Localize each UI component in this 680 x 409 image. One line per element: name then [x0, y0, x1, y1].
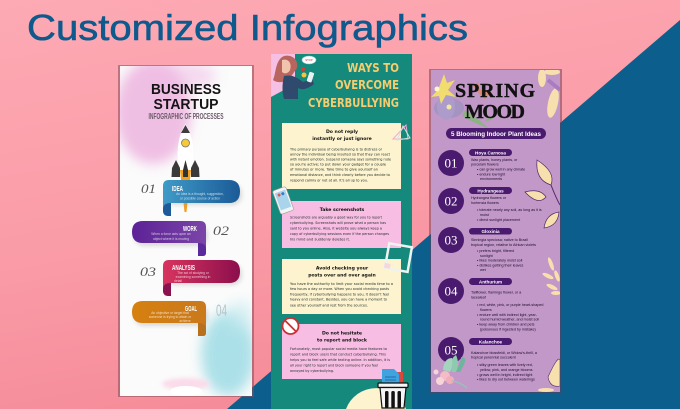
- heading: STARTUP: [154, 97, 219, 113]
- step 02 work: When a force acts upon an: [151, 232, 191, 236]
- item 03: tropical region, relative to African violets: [471, 243, 536, 247]
- step 03 analysis: [140, 260, 242, 296]
- item 02: [438, 187, 542, 222]
- heading: SPRING: [455, 80, 535, 102]
- item 03: 03: [444, 232, 458, 248]
- card 2: [282, 201, 401, 248]
- card 3: few hours a day or more. When you avoid checking posts: [290, 287, 389, 291]
- item 05: • silky green leaves with lively red,: [477, 363, 533, 367]
- card 1: [282, 123, 401, 189]
- item 04: Anthurium: [479, 279, 502, 284]
- item 02: Hydrangeas: [477, 188, 504, 193]
- bottom cream circle: [346, 388, 406, 409]
- card 4: all your right to report and block someone if you feel: [290, 364, 378, 368]
- heading: [308, 61, 399, 110]
- heading: [148, 82, 224, 121]
- card 4: [282, 324, 401, 379]
- card 1: of minutes or more. Take time to give yourself an: [290, 168, 378, 172]
- card 2: said to you online. Also, it website you always keep a: [290, 226, 382, 230]
- step 01 idea: IDEA: [172, 186, 183, 193]
- card 2: his mind and suddenly deletes it.: [290, 238, 350, 242]
- card 4: Do not hesitate: [322, 330, 362, 336]
- watercolor washes: [115, 60, 255, 396]
- step 03 analysis: 03: [140, 264, 157, 279]
- item 03: • dislikes getting their leaves: [477, 264, 524, 268]
- item 01: environments: [480, 177, 502, 181]
- icon: rocket: [172, 124, 200, 212]
- item 02: moist: [480, 213, 489, 217]
- item 01: 01: [444, 156, 458, 170]
- step 03 analysis: The act of studying or: [177, 271, 210, 275]
- step 01 idea: An idea is a thought, suggestion,: [176, 192, 224, 196]
- step 02 work: [132, 221, 230, 256]
- item 05: tropical perennial succulent: [471, 356, 516, 360]
- illustration: girl with phone: [273, 56, 316, 99]
- card 1: respond calmly or not at all. It's all up to you.: [290, 178, 368, 182]
- item 04: [438, 278, 543, 332]
- item 01: [438, 149, 525, 181]
- subtitle pill: 5 Blooming Indoor Plant Ideas: [451, 132, 542, 138]
- item 01: Wax plants, honey plants, or: [471, 158, 518, 162]
- icon: trash bin with documents: [378, 369, 408, 408]
- blue diagonal background: [227, 20, 680, 409]
- item 04: 04: [444, 284, 458, 298]
- heading: BUSINESS: [151, 82, 221, 98]
- panel: cyberbullying: [271, 54, 412, 409]
- card 2: Take screenshots: [320, 207, 365, 213]
- item 03: • likes moderately moist soil: [477, 258, 523, 262]
- card 4: annoyed by cyberbullying.: [290, 369, 334, 373]
- item 05: Kalanchoe: [479, 339, 503, 344]
- card 4: to report and block: [317, 338, 368, 344]
- card 1: instantly or just ignore: [312, 136, 372, 142]
- item 04: Tailflower, flamingo flower, or a: [471, 290, 522, 294]
- item 05: [438, 337, 538, 382]
- illustration: girl with phone: STOP: [305, 58, 313, 62]
- item 05: 05: [444, 342, 458, 358]
- icon: photo frame: [384, 243, 412, 272]
- icon: phone: [272, 186, 294, 215]
- card 3: see other yourself and rest from the sources.: [290, 304, 368, 308]
- step 04 goal: [132, 301, 227, 336]
- step 01 idea: 01: [141, 181, 156, 196]
- item 02: 02: [444, 194, 458, 208]
- item 05: Kalanchoe blossfeldi, or Widow's-thrill, a: [471, 351, 538, 355]
- step 01 idea: or possible course of action: [180, 196, 220, 200]
- card 3: Avoid checking your: [316, 266, 369, 272]
- step 02 work: object where it is moving: [153, 237, 189, 241]
- card 2: cyberbullying. Screenshots will prove what a person has: [290, 221, 386, 225]
- card 4: helps you to feel safe while texting online. In addition, it is: [290, 358, 390, 362]
- card 3: posts over and over again: [308, 272, 376, 278]
- item 05: • likes to dry out between waterings: [477, 378, 535, 382]
- step 04 goal: An objective or target that: [151, 311, 189, 315]
- card 1: with instant emotion. Suspend someone says something rude: [290, 158, 392, 162]
- step 02 work: WORK: [183, 226, 197, 233]
- subtitle pill: [446, 128, 546, 139]
- item 02: Hydrangea flowers or: [471, 196, 507, 200]
- item 01: • endure low light: [477, 172, 505, 176]
- item 03: • prefers bright, filtered: [477, 249, 514, 253]
- heading: [455, 80, 535, 123]
- card 2: Screenshots are arguably a good way for you to report: [290, 216, 383, 220]
- step 04 goal: someone is trying to attain or: [149, 315, 192, 319]
- item 01: Hoya Carnosa: [475, 150, 506, 155]
- panel: spring mood: [429, 69, 562, 394]
- step 04 goal: achieve: [179, 319, 191, 323]
- panel: business startup: [115, 60, 255, 397]
- icon: triangles: [393, 125, 410, 140]
- item 01: • can grow well in any climate: [477, 168, 525, 172]
- heading: WAYS TO: [347, 61, 399, 75]
- item 04: round humid weather, and moist soil: [480, 318, 539, 322]
- item 03: sunlight: [480, 254, 493, 258]
- step 04 goal: GOAL: [185, 306, 197, 313]
- leaf bottom right: [548, 359, 560, 386]
- step 03 analysis: examining something in: [176, 275, 210, 279]
- item 03: Gloxinia: [481, 229, 500, 234]
- floral decorations: [431, 69, 561, 392]
- item 03: [438, 227, 536, 272]
- step 04 goal: 04: [216, 301, 227, 320]
- item 02: • direct sunlight placement: [477, 218, 520, 222]
- item 02: hortensia flowers: [471, 201, 499, 205]
- item 04: • keep away from children and pets: [477, 322, 535, 326]
- card 3: You have the authority to limit your social media time to a: [290, 282, 393, 286]
- heading: MOOD: [465, 101, 525, 123]
- item 04: lacealeaf: [471, 296, 487, 300]
- wheat sprig right: [542, 257, 561, 295]
- leaf branch right: [525, 160, 559, 228]
- heading: INFOGRAPHIC OF PROCESSES: [148, 112, 224, 121]
- card 1: so you're active; to put down your gadget for a couple: [290, 162, 387, 166]
- item 04: flowers: [480, 308, 492, 312]
- item 04: • red, white, pink, or purple heart-shaped: [477, 303, 543, 307]
- card 1: The primary purpose of cyberbullying is to distress or: [289, 148, 382, 152]
- item 02: • tolerate nearly any soil, as long as it is: [477, 208, 542, 212]
- item 01: porcelain flowers: [471, 162, 499, 166]
- card 1: annoy the individual being insulted so that they can react: [290, 152, 391, 156]
- item 05: yellow, pink, and orange blooms: [480, 368, 533, 372]
- title: Customized Infographics: [27, 7, 468, 48]
- item 03: wet: [480, 268, 486, 272]
- heading: OVERCOME: [335, 78, 399, 92]
- card 3: [282, 259, 401, 314]
- card 4: report and block users that conduct cyberbullying. This: [290, 352, 386, 356]
- step 02 work: 02: [213, 223, 230, 238]
- step 03 analysis: ANALYSIS: [172, 265, 195, 272]
- heading: CYBERBULLYING: [308, 96, 399, 110]
- item 04: • endure well with indirect light, year-: [477, 313, 538, 317]
- icon: no sign: [282, 318, 298, 334]
- card 1: emotional distance, and think clearly before you decide to: [290, 173, 390, 177]
- card 2: copy of cyberbullying sessions even if the person changes: [290, 232, 389, 236]
- step 01 idea: [141, 180, 242, 216]
- card 3: heavy and constant. Besides, you can have a moment to: [290, 298, 387, 302]
- card 1: Do not reply: [326, 129, 358, 135]
- card 4: Fortunately, most popular social media have features to: [290, 347, 387, 351]
- item 03: Sinningia speciosa; native to Brazil: [471, 238, 528, 242]
- step 03 analysis: detail: [174, 279, 182, 283]
- item 05: • grows well in bright, indirect light: [477, 373, 532, 377]
- item 04: (poisonous if ingested by mistake): [480, 328, 536, 332]
- card 3: frequently, if cyberbullying happens to you, it doesn't feel: [290, 292, 389, 296]
- floral bottom left: [434, 355, 467, 388]
